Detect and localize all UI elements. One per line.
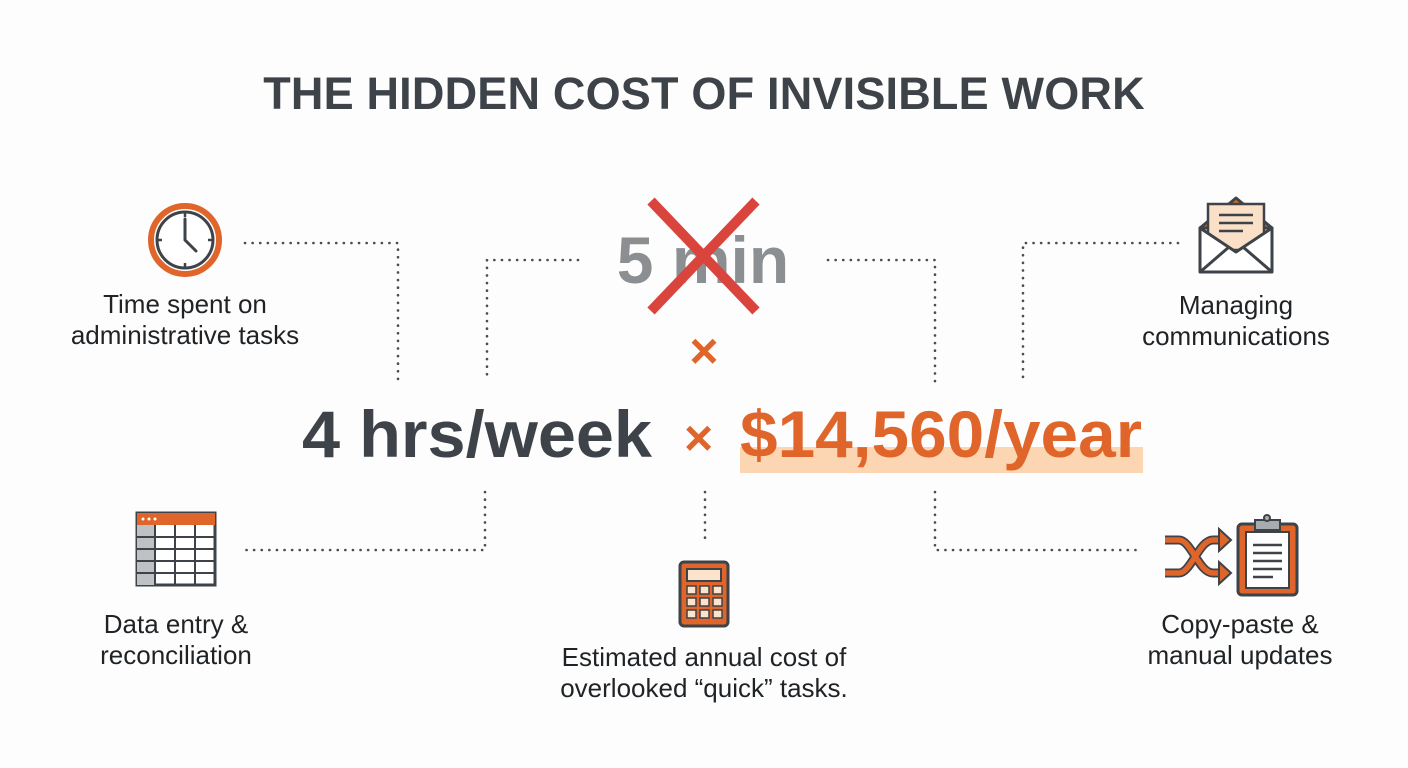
equation: × xyxy=(684,410,713,466)
multiply sign: × xyxy=(689,323,719,379)
label: annual cost: Estimated annual cost of xyxy=(562,642,846,672)
5 min crossed: 5 min xyxy=(617,223,789,297)
5 min crossed xyxy=(617,201,789,311)
icon: shuffle and clipboard xyxy=(1165,515,1297,595)
label: data entry xyxy=(100,609,252,670)
highlight xyxy=(740,447,1143,473)
icon: clock xyxy=(151,206,219,274)
label: admin: administrative tasks xyxy=(71,320,299,350)
label: copy paste xyxy=(1147,609,1333,670)
label: annual cost: overlooked “quick” tasks. xyxy=(560,673,848,703)
label: data entry: reconciliation xyxy=(100,640,252,670)
icon: calculator xyxy=(680,562,728,626)
equation xyxy=(302,397,1142,471)
label: communications: Managing xyxy=(1179,290,1293,320)
label: communications xyxy=(1142,290,1330,351)
label: data entry: Data entry & xyxy=(104,609,248,639)
label: admin xyxy=(71,289,299,350)
label: annual cost xyxy=(560,642,848,703)
equation: 4 hrs/week xyxy=(302,397,652,471)
icon: envelope xyxy=(1200,198,1272,272)
icon: spreadsheet xyxy=(137,513,215,585)
label: copy paste: manual updates xyxy=(1147,640,1333,670)
title: THE HIDDEN COST OF INVISIBLE WORK xyxy=(263,68,1145,119)
label: admin: Time spent on xyxy=(103,289,267,319)
label: copy paste: Copy-paste & xyxy=(1161,609,1319,639)
equation: $14,560/year xyxy=(740,397,1142,471)
label: communications: communications xyxy=(1142,321,1330,351)
